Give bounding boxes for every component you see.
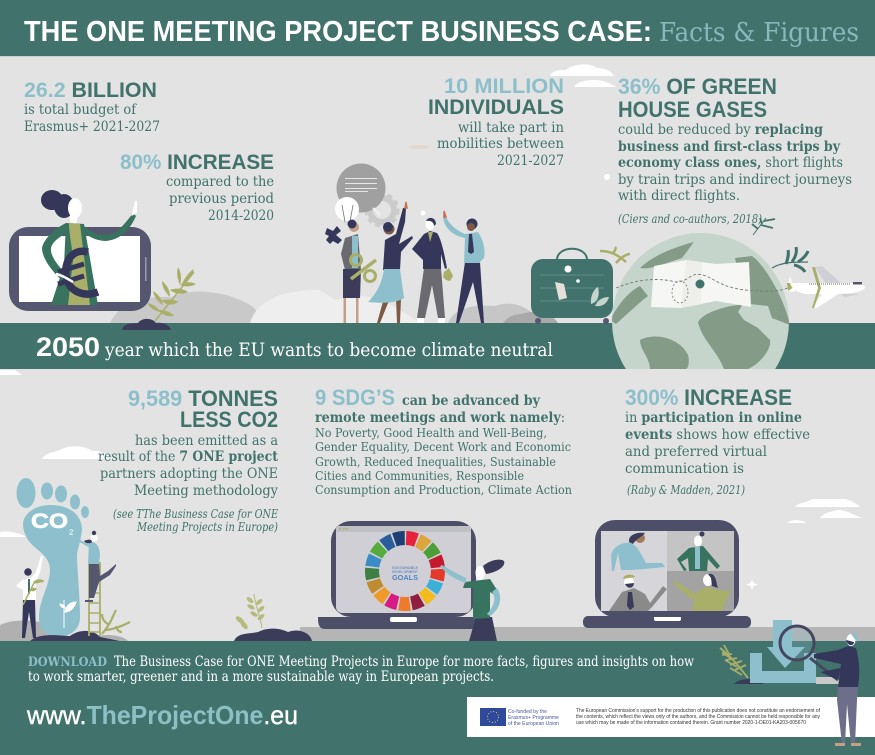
stat: 9 SDGs: Gender Equality, Decent Work and Economic bbox=[315, 439, 571, 454]
icon: CO2 footprint with figures bbox=[16, 478, 120, 641]
person 4 bbox=[443, 211, 485, 323]
stat: 36% of green house gases: economy class ones, short flights bbox=[618, 155, 843, 171]
stat: 300% increase: in participation in online bbox=[625, 410, 802, 426]
title: THE ONE MEETING PROJECT BUSINESS CASE: bbox=[24, 16, 652, 48]
stat: 10 million individuals: will take part in bbox=[458, 120, 564, 136]
background mounds and clouds, upper section bbox=[110, 64, 616, 323]
stat: 26.2 billion: 26.2 BILLION bbox=[24, 79, 157, 102]
stat: 36% of green house gases: (Ciers and co-authors, 2018) bbox=[618, 212, 762, 226]
icon: gear bbox=[366, 194, 398, 226]
people group illustration bbox=[325, 164, 485, 323]
stat: 36% of green house gases: by train trips and indirect journeys bbox=[618, 172, 852, 188]
stat: 80% increase: compared to the bbox=[166, 174, 274, 190]
stat: 9,589 tonnes less CO2: partners adopting the ONE bbox=[100, 466, 278, 482]
download text: DOWNLOAD bbox=[28, 655, 107, 670]
band: 2050: 2050 bbox=[36, 332, 100, 362]
plant near ladder bbox=[102, 610, 130, 634]
stat: 10 million individuals: 10 MILLION bbox=[444, 75, 564, 98]
laptop with SDG wheel bbox=[318, 521, 504, 641]
clouds, lower section bbox=[0, 370, 862, 590]
band: download bbox=[0, 641, 875, 755]
disclaimer text: The European Commission's support for the production of this publication does not constitute an endorsement of bbox=[576, 708, 820, 714]
stat: 300% increase: (Raby & Madden, 2021) bbox=[627, 483, 745, 497]
band: 2050: year which the EU wants to become climate neutral bbox=[104, 339, 553, 361]
disclaimer text bbox=[576, 708, 820, 726]
stat: 9 SDGs bbox=[315, 385, 572, 497]
icon: suitcase bbox=[531, 249, 613, 324]
co-funded text: Erasmus+ Programme bbox=[508, 715, 559, 721]
stat: 80% increase bbox=[120, 151, 274, 224]
stat: 9 SDGs: can be advanced by bbox=[402, 393, 541, 409]
stat: 9,589 tonnes less CO2: result of the 7 ONE project bbox=[98, 449, 278, 465]
footprint bbox=[16, 478, 89, 637]
video participant 2 bbox=[677, 532, 720, 571]
icon: airplane bbox=[787, 266, 865, 308]
plant branch bbox=[720, 645, 748, 678]
stat: 9 SDGs: Cities and Communities, Responsible bbox=[315, 468, 524, 483]
person 1 bbox=[341, 220, 376, 323]
stat: 36% of green house gases bbox=[618, 74, 852, 226]
icon: download arrow with magnifier and man bbox=[720, 620, 861, 746]
man bbox=[814, 632, 861, 746]
stat: 300% increase bbox=[625, 385, 810, 497]
co-funded text: of the European Union bbox=[508, 721, 559, 727]
ground strip, lower section bbox=[0, 620, 875, 641]
download text: The Business Case for ONE Meeting Projects in Europe for more facts, figures and insights on how bbox=[114, 654, 694, 670]
stat: 300% increase: communication is bbox=[625, 461, 744, 477]
disclaimer text: use which may be made of the information contained therein. Grant number 2020-1-DE01-KA203-005670 bbox=[576, 720, 806, 726]
icon: folded map bbox=[651, 260, 751, 308]
mounds under footprint bbox=[30, 631, 120, 641]
dress bbox=[51, 223, 98, 305]
CO2 label: CO bbox=[31, 510, 68, 533]
plant, upper left bbox=[147, 267, 196, 321]
disclaimer text: the contents, which reflect the views only of the authors, and the Commission cannot be held responsible for any bbox=[576, 714, 820, 720]
figure with plant bbox=[16, 556, 44, 638]
icon: speech bubble bbox=[336, 164, 386, 215]
stat: 9,589 tonnes less CO2: LESS CO2 bbox=[180, 407, 278, 432]
magnifier bbox=[780, 626, 838, 680]
mound bbox=[734, 678, 763, 684]
stat: 80% increase: previous period bbox=[169, 191, 274, 207]
stat: 9 SDGs: Consumption and Production, Climate Action bbox=[315, 482, 572, 497]
video participant 4 bbox=[673, 574, 730, 611]
stat: 9,589 tonnes less CO2: Meeting Projects in Europe) bbox=[136, 520, 278, 534]
arrow bbox=[767, 620, 805, 668]
SDG wheel caption: GOALS bbox=[392, 573, 418, 582]
stat: 36% of green house gases: HOUSE GASES bbox=[618, 97, 767, 122]
stat: 36% of green house gases: 36% OF GREEN bbox=[618, 74, 777, 99]
stat: 9,589 tonnes less CO2 bbox=[98, 386, 278, 534]
header band bbox=[0, 0, 875, 57]
stat: 9,589 tonnes less CO2: 9,589 TONNES bbox=[128, 386, 278, 411]
plant branches around the globe bbox=[600, 218, 808, 272]
stat: 10 million individuals: mobilities between bbox=[437, 136, 564, 152]
download text bbox=[28, 654, 694, 685]
woman presenting bbox=[440, 560, 504, 641]
EU flag bbox=[480, 708, 506, 726]
disclaimer box bbox=[467, 697, 875, 737]
person 2 bbox=[368, 202, 413, 323]
stat: 300% increase: 300% INCREASE bbox=[625, 385, 792, 410]
co-funded text: Co-funded by the bbox=[508, 709, 547, 715]
icon: globe with map bbox=[612, 233, 789, 369]
stat: 26.2 billion bbox=[24, 79, 160, 135]
icon: light bulb bbox=[335, 197, 359, 225]
stat: 300% increase: and preferred virtual bbox=[625, 444, 767, 460]
person 3 bbox=[412, 218, 453, 323]
stat: 36% of green house gases: business and first-class trips by bbox=[618, 139, 841, 155]
stat: 36% of green house gases: could be reduced by replacing bbox=[618, 122, 823, 138]
stat: 80% increase: 2014-2020 bbox=[208, 208, 274, 224]
stat: 9,589 tonnes less CO2: has been emitted as a bbox=[135, 433, 278, 449]
icon: puzzle piece bbox=[325, 226, 342, 244]
ladder bbox=[89, 562, 100, 636]
stat: 9,589 tonnes less CO2: Meeting methodology bbox=[134, 483, 278, 499]
SDG wheel caption bbox=[392, 566, 419, 582]
stat: 9 SDGs: 9 SDG’S bbox=[315, 385, 395, 410]
co-funded text bbox=[508, 709, 559, 727]
euro sign bbox=[58, 251, 98, 294]
stat: 80% increase: 80% INCREASE bbox=[120, 151, 274, 174]
stat: 300% increase: events shows how effective bbox=[625, 427, 810, 443]
icon: CO2 footprint with figures: 2 bbox=[69, 528, 74, 537]
SDG wheel bbox=[358, 524, 452, 618]
SDG wheel caption: SUSTAINABLE bbox=[392, 566, 418, 570]
stat: 36% of green house gases: with direct flights. bbox=[618, 188, 740, 204]
stat: 9,589 tonnes less CO2: (see TThe Business Case for ONE bbox=[113, 507, 278, 521]
stat: 10 million individuals: 2021-2027 bbox=[497, 153, 564, 169]
stat: 26.2 billion: is total budget of bbox=[24, 102, 138, 118]
subtitle: Facts & Figures bbox=[659, 18, 859, 48]
download text: to work smarter, greener and in a more sustainable way in European projects. bbox=[28, 669, 494, 685]
arm raised bbox=[82, 213, 136, 241]
stat: 10 million individuals bbox=[428, 75, 564, 169]
video participant 1 bbox=[611, 533, 665, 571]
icon: phone with woman and euro sign bbox=[9, 190, 151, 311]
stat: 9 SDGs: No Poverty, Good Health and Well-Being, bbox=[315, 425, 547, 440]
figure on ladder bbox=[78, 531, 116, 602]
stat: 26.2 billion: Erasmus+ 2021-2027 bbox=[24, 119, 160, 135]
video participant 3 bbox=[609, 575, 667, 611]
website url: www.TheProjectOne.eu bbox=[26, 700, 298, 730]
SDG wheel caption: DEVELOPMENT bbox=[392, 570, 419, 574]
tray bbox=[750, 653, 816, 683]
stat: 10 million individuals: INDIVIDUALS bbox=[428, 96, 564, 119]
plant with navy mound, lower centre bbox=[234, 594, 312, 641]
laptop with video call bbox=[583, 520, 751, 628]
band: 2050 bbox=[0, 323, 875, 369]
navy mound, upper left bbox=[122, 319, 171, 330]
stat: 9 SDGs: remote meetings and work namely: bbox=[315, 410, 565, 426]
stat: 9 SDGs: Growth, Reduced Inequalities, Sustainable bbox=[315, 454, 556, 469]
